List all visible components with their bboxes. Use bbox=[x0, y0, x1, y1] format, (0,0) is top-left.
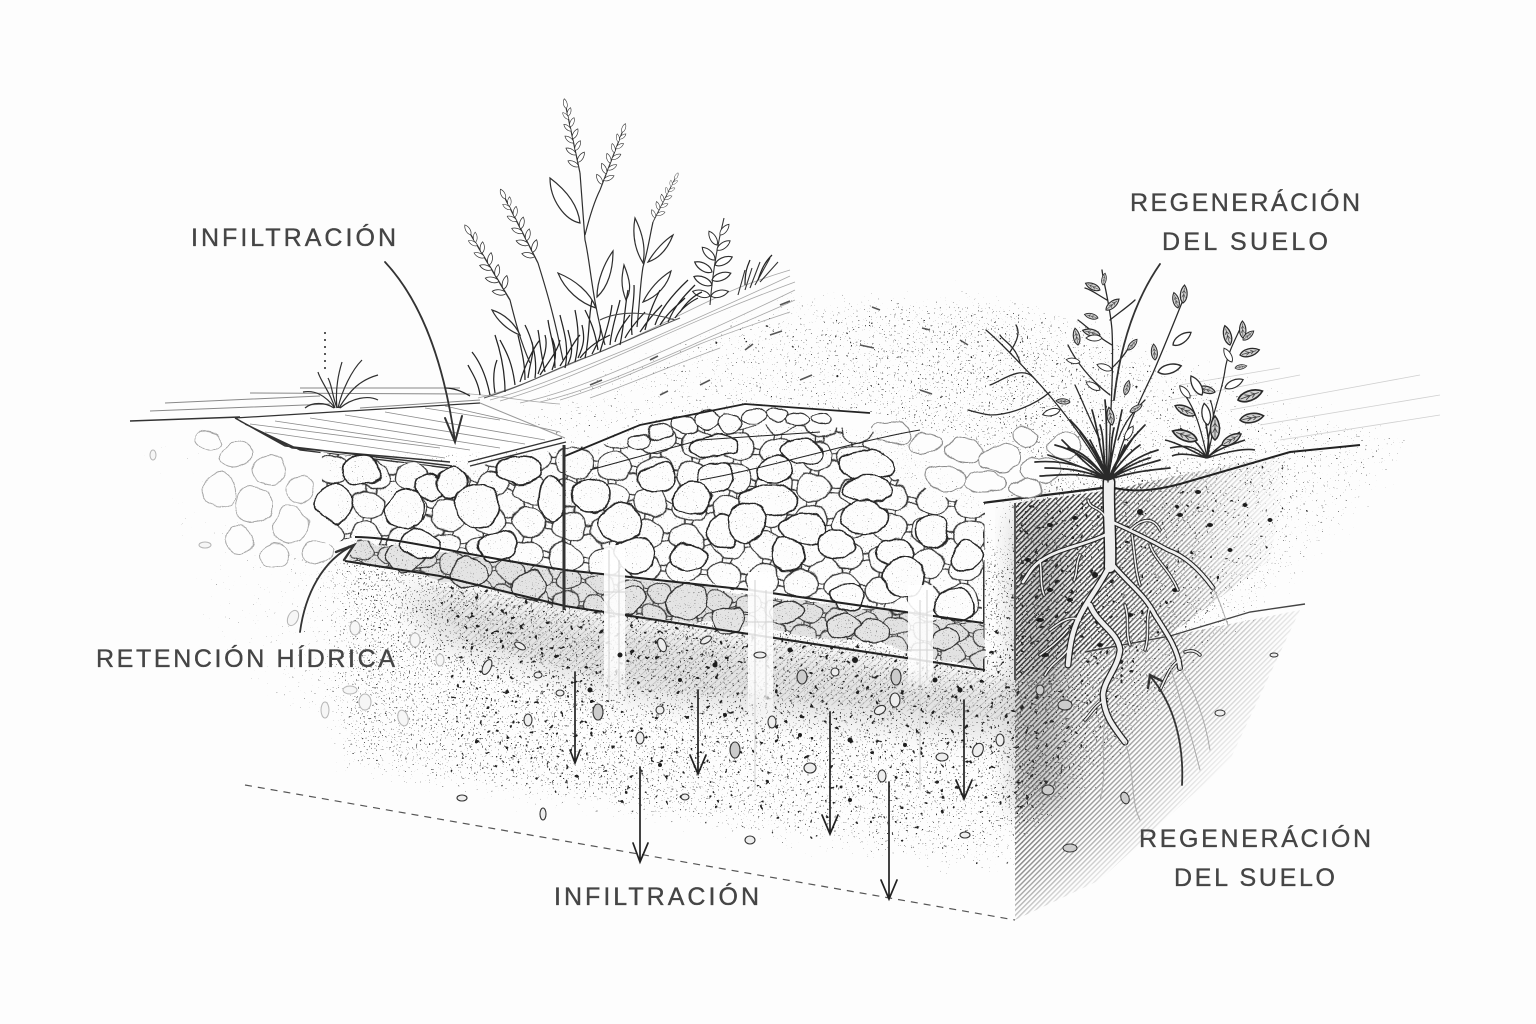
arrow: retención hídrica bbox=[300, 545, 354, 632]
faded pebbles left bbox=[150, 450, 444, 727]
faint wind lines right bbox=[1170, 368, 1440, 440]
main gravel stones, faded upper right bbox=[872, 422, 1081, 497]
percolation streaks bbox=[600, 545, 935, 790]
divider post bbox=[562, 445, 566, 610]
stipple shading on stones bbox=[325, 425, 983, 670]
plant: broad leaves bbox=[492, 178, 673, 335]
plant: main shrub bbox=[968, 270, 1183, 482]
soil shading under the gravel bbox=[400, 585, 1015, 740]
hill edge contours bbox=[470, 270, 795, 404]
left ground surface lines bbox=[150, 388, 480, 411]
gravel layer lines bbox=[345, 404, 985, 670]
soil pebbles bbox=[457, 634, 1004, 844]
roots bbox=[1023, 482, 1228, 820]
right face: dark soil specks bbox=[1025, 490, 1272, 657]
top gravel strip bbox=[629, 407, 833, 448]
label: regeneración del suelo bottom bbox=[1139, 824, 1371, 892]
label: retención hídrica: RETENCIÓN HÍDRICA bbox=[96, 644, 395, 673]
main gravel stones, faded left side bbox=[195, 429, 333, 567]
arrows: infiltration downward bbox=[570, 672, 972, 899]
gravel backing bbox=[200, 405, 1060, 672]
plant: right shrub bbox=[1165, 321, 1264, 458]
plank front edge bbox=[235, 418, 566, 468]
label: regeneración del suelo bottom: REGENERÁCIÓN bbox=[1139, 824, 1371, 853]
arrow: regeneración bottom bbox=[1148, 675, 1182, 785]
arrow: regeneración top bbox=[1114, 264, 1160, 400]
label: regeneración del suelo top: REGENERÁCIÓN bbox=[1130, 188, 1360, 217]
main gravel stones bbox=[317, 434, 981, 620]
soil shading hatch bbox=[430, 585, 1015, 720]
right face: pebbles bbox=[1036, 653, 1278, 852]
plant: small bush bbox=[692, 218, 778, 305]
label: infiltración top: INFILTRACIÓN bbox=[191, 223, 396, 252]
base dashed line bbox=[245, 785, 1015, 920]
illustration: soil cross-section bbox=[98, 98, 1440, 921]
label: regeneración del suelo bottom: DEL SUELO bbox=[1174, 864, 1335, 892]
fine root tips bbox=[1100, 588, 1228, 820]
plank deck bbox=[235, 402, 566, 468]
strata line on right face bbox=[1085, 604, 1305, 652]
plant: small tuft bbox=[303, 332, 378, 408]
left face strip bbox=[982, 487, 1110, 680]
right face: dark hatched soil bbox=[1015, 452, 1300, 920]
stipple: coarser specks bbox=[430, 300, 1440, 880]
label: regeneración del suelo top: DEL SUELO bbox=[1162, 228, 1328, 256]
lower layer backing bbox=[350, 540, 983, 670]
surface dashes on hill bbox=[590, 301, 968, 424]
plant: grasses on the hill bbox=[445, 97, 778, 396]
stipple: soil and ground surface bbox=[120, 290, 1450, 885]
label: regeneración del suelo top bbox=[1130, 188, 1360, 256]
plant: grass blades bbox=[445, 255, 772, 396]
label: infiltración bottom: INFILTRACIÓN bbox=[554, 882, 759, 911]
surface lip on right face bbox=[1110, 445, 1360, 490]
soil specks bbox=[588, 648, 962, 802]
arrow: infiltración top bbox=[385, 262, 462, 442]
plant: shrub leaves bbox=[1042, 273, 1193, 442]
gravel core network bbox=[320, 425, 983, 623]
lower retention layer stones bbox=[386, 542, 960, 651]
left ground edge bbox=[130, 417, 240, 421]
shrub base fan bbox=[1035, 400, 1170, 480]
